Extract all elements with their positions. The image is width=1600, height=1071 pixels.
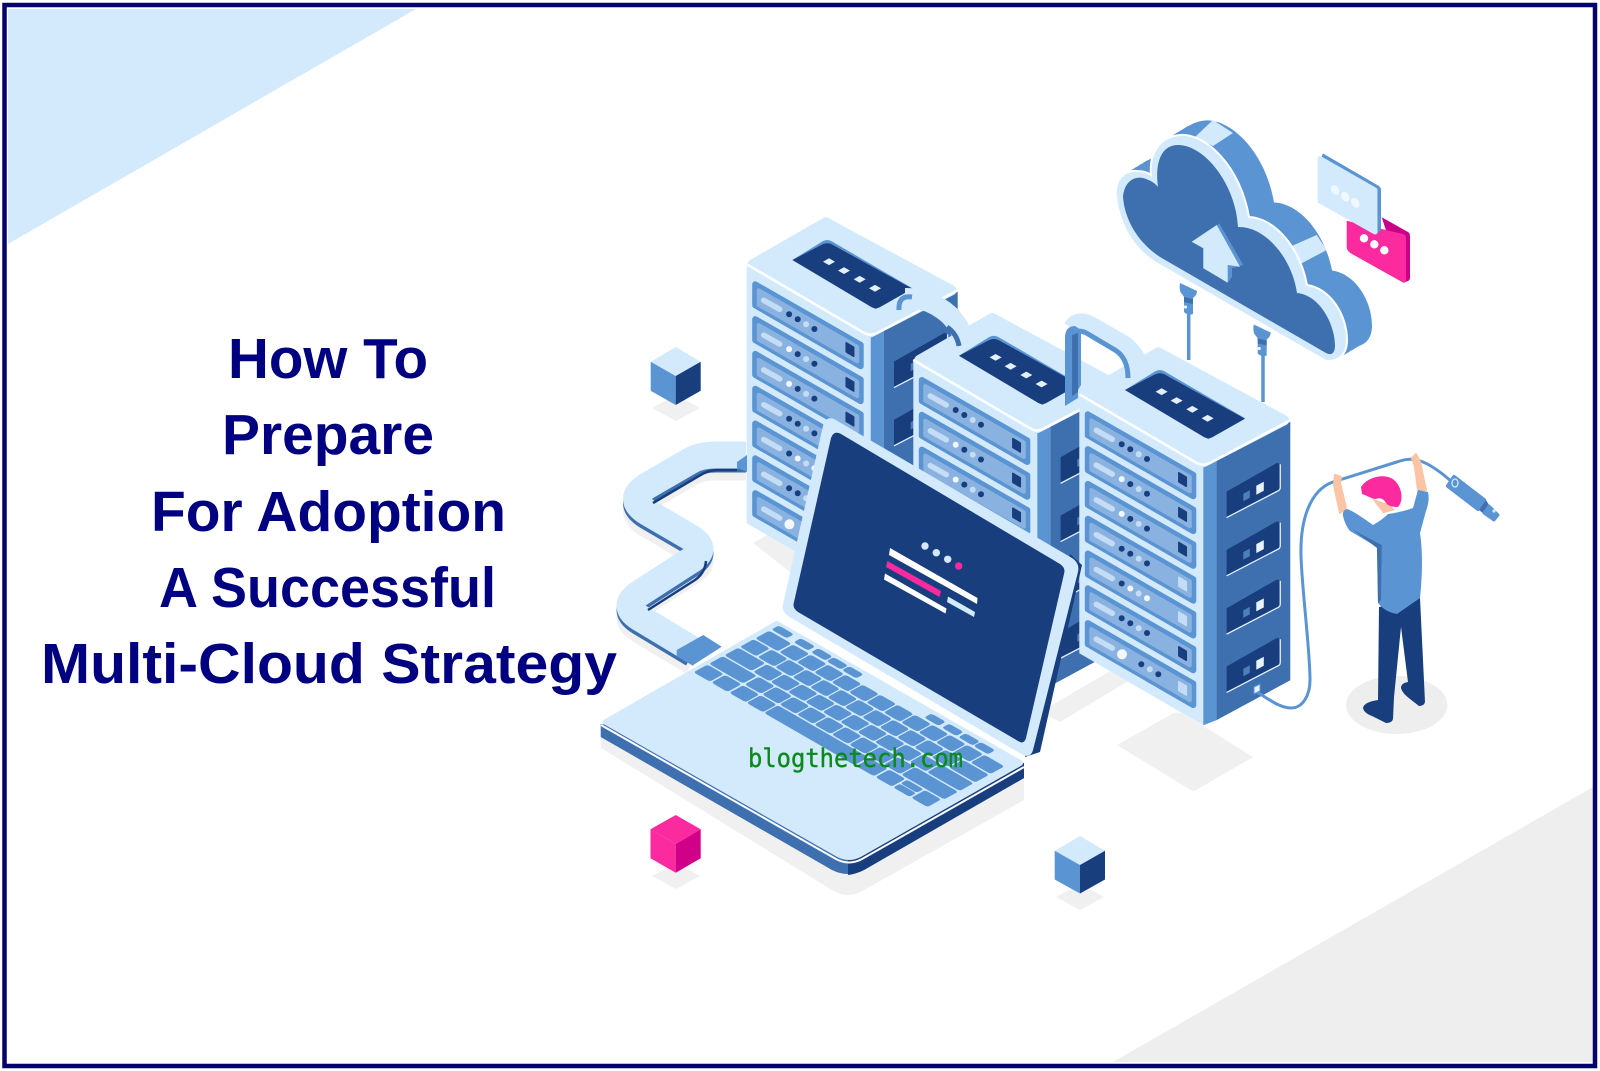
hair xyxy=(1361,476,1402,507)
cable xyxy=(1257,459,1452,708)
laptop base xyxy=(601,624,1024,875)
cable between rack 2 and rack 3 xyxy=(1065,322,1140,406)
laptop screen frame xyxy=(783,418,1078,756)
screen content xyxy=(884,542,978,617)
laptop screen back xyxy=(1025,554,1082,757)
title xyxy=(41,327,617,696)
underarm shade xyxy=(1353,530,1382,603)
rack port xyxy=(1254,684,1260,694)
title: A Successful xyxy=(159,556,496,620)
person with cable xyxy=(1254,454,1498,734)
arms xyxy=(1334,454,1426,513)
laptop screen xyxy=(794,433,1064,742)
cloud to rack cables xyxy=(1180,283,1271,402)
pink bubble xyxy=(1347,217,1410,283)
shirt xyxy=(1343,490,1429,614)
cable between rack 1 and rack 2 xyxy=(899,297,965,346)
legs xyxy=(1363,598,1425,723)
background corner: gray triangle xyxy=(1113,787,1593,1062)
upload arrow xyxy=(1192,223,1243,283)
cube: blue bottom xyxy=(1055,836,1105,894)
laptop xyxy=(601,418,1082,875)
watermark: blogthetech.com xyxy=(748,744,963,774)
server rack 2 xyxy=(913,318,1124,691)
light bubble xyxy=(1320,154,1381,235)
cube: pink xyxy=(650,815,701,873)
chat bubbles xyxy=(1320,154,1410,283)
neck xyxy=(1372,498,1395,513)
server rack 1 xyxy=(747,222,958,595)
title: Prepare xyxy=(222,403,434,467)
floor shadows xyxy=(601,395,1253,910)
title: For Adoption xyxy=(151,480,506,544)
plug xyxy=(1448,477,1498,520)
cloud with upload arrow xyxy=(1116,120,1372,361)
USB connector xyxy=(677,635,722,666)
keyboard xyxy=(694,626,1013,807)
cube: blue top-left xyxy=(651,347,701,405)
server rack 3 xyxy=(1079,352,1290,725)
title: How To xyxy=(228,327,428,391)
cable from laptop to rack xyxy=(630,455,747,654)
title: Multi-Cloud Strategy xyxy=(41,632,617,696)
ground shadow xyxy=(1346,676,1447,734)
background corner: light blue triangle xyxy=(8,9,416,244)
